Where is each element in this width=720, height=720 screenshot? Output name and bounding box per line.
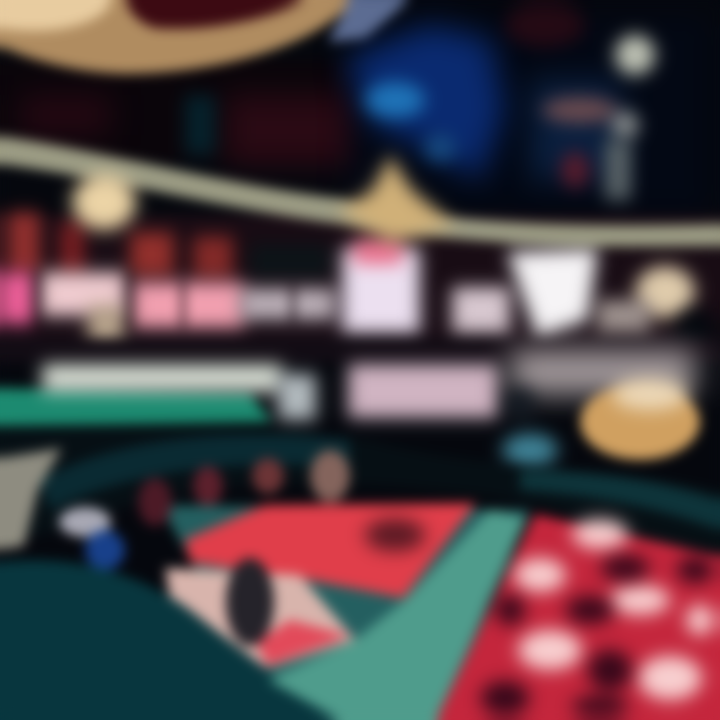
- ceiling: dark upper area with blue glow: [0, 3, 710, 215]
- pale counter, centre: [348, 364, 498, 418]
- right side pale wall and tan orb: [502, 350, 700, 467]
- beige floor patch, far left: [0, 448, 62, 550]
- dark curved railing: [0, 425, 720, 570]
- dark teal foreground floor: [0, 560, 340, 720]
- teal floor behind tables: [160, 505, 530, 720]
- lamp: left globe: [72, 174, 136, 230]
- white table section with dark figure: [165, 558, 355, 670]
- seated patrons along railing: [59, 450, 350, 570]
- dark lower wall strip: [0, 338, 720, 362]
- dark slats across machines: [34, 270, 296, 330]
- red gaming table: [185, 503, 476, 598]
- lamp: central star chandelier: [338, 155, 455, 242]
- balcony row: wall and pink slot machines: [0, 212, 720, 372]
- teal strip between tables: [268, 510, 526, 720]
- curved balcony band: [0, 136, 720, 247]
- red checkered table, right: [436, 514, 720, 720]
- ceiling dome: tan arc top left: [0, 0, 410, 74]
- green and white gaming counter, left: [0, 364, 316, 426]
